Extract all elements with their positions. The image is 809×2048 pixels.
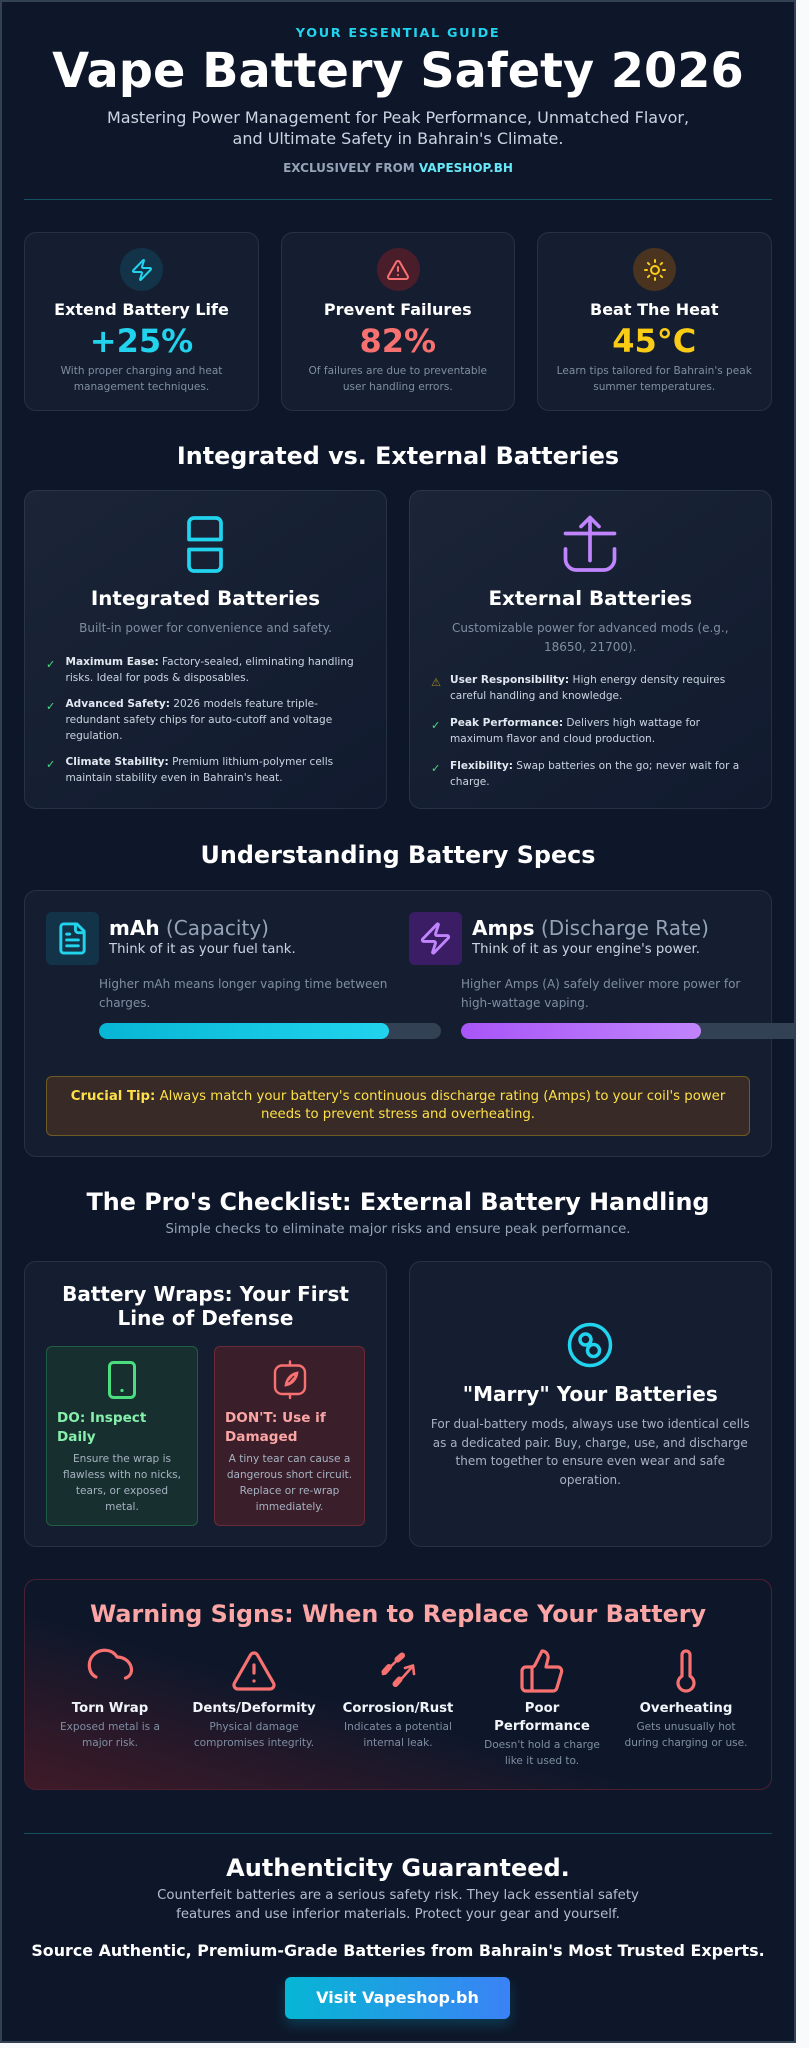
callout: crucial tip: needs to prevent stress and overheating. [261,1107,535,1122]
spec: mAh description: Higher mAh means longer vaping time between [99,977,387,991]
description: compromises integrity. [194,1737,314,1749]
icon: watch compass [274,1360,306,1400]
heading: Battery Wraps: Your First [62,1282,349,1306]
label: Corrosion/Rust [343,1701,453,1716]
description [431,1417,750,1487]
description: user handling errors. [343,381,453,393]
description: Doesn't hold a charge [484,1739,600,1751]
header [52,26,744,175]
panel: battery specs [24,890,772,1157]
spec: amps description: Higher Amps (A) safely deliver more power for [461,977,740,991]
subheading: checklist: Simple checks to eliminate major risks and ensure peak performance. [165,1222,631,1237]
call to action text: Source Authentic, Premium-Grade Batteries from Bahrain's Most Trusted Experts. [31,1941,765,1960]
panel: stat prevent failures [280,232,515,411]
eyebrow: YOUR ESSENTIAL GUIDE [296,26,500,41]
description: summer temperatures. [593,381,715,393]
description [0,1887,796,1925]
don't description: immediately. [256,1501,323,1513]
heading: Warning Signs: When to Replace Your Battery [90,1600,706,1628]
description: like it used to. [505,1755,579,1767]
icon: torn wrap cloud [88,1648,134,1680]
description: operation. [560,1473,621,1487]
description: major risk. [82,1737,138,1749]
list item: maximum ease: Maximum Ease: Factory-sealed, eliminating handling [66,656,354,668]
label: Performance [494,1719,590,1734]
list item: flexibility: Flexibility: Swap batteries on the go; never wait for a [450,760,739,772]
icon: split battery [187,516,223,573]
description: Indicates a potential [344,1721,452,1733]
heading: Prevent Failures [324,300,472,319]
do description: Ensure the wrap is [73,1453,171,1465]
panel: integrated batteries [24,490,387,809]
do heading: DO: Inspect [57,1410,146,1426]
heading: "Marry" Your Batteries [463,1382,718,1406]
list item: advanced safety: Advanced Safety: 2026 models feature triple- [66,698,318,710]
stat value: 82% [359,322,436,360]
panel: external batteries [408,490,772,809]
list item: maximum ease: risks. Ideal for pods & disposables. [66,672,249,684]
list item: flexibility: charge. [450,776,490,788]
list item: advanced safety: ✓ [46,700,55,712]
card: don't use if damaged [214,1346,365,1526]
spec: mAh description: charges. [99,996,150,1010]
panel: marry your batteries [408,1261,772,1547]
button: Visit Vapeshop.bh [316,1988,479,2007]
description [472,1737,612,1769]
stat value: 45°C [612,322,696,360]
sign: overheating [616,1647,756,1777]
description: Learn tips tailored for Bahrain's peak [557,365,752,377]
icon: removable battery arrow [564,516,616,572]
icon: thermometer [662,1647,710,1695]
bar: amps discharge [461,1023,803,1039]
list item: climate stability: ✓ [46,758,55,770]
list item: peak performance [431,716,700,744]
icon: warning triangle [376,248,420,291]
label: Torn Wrap [72,1701,148,1716]
don't heading: DON'T: Use if [225,1410,326,1426]
heading: Extend Battery Life [54,300,229,319]
icon: thumbs up [520,1649,564,1693]
heading: understanding specs: Understanding Battery Specs [201,841,595,869]
do description: metal. [105,1501,139,1513]
heading: External Batteries [488,587,692,610]
do heading [57,1410,146,1445]
do description [63,1453,181,1513]
spec: amps description [461,977,740,1010]
list item: climate stability: Climate Stability: Premium lithium-polymer cells [66,756,333,768]
icon: lightning [408,912,462,965]
stat value: +25% [90,322,193,360]
heading: Authenticity Guaranteed. [226,1854,570,1882]
description: With proper charging and heat [61,365,222,377]
list item: advanced safety: regulation. [66,730,122,742]
description [308,365,487,393]
description: management techniques. [74,381,209,393]
icon: smartphone [108,1361,136,1399]
subtitle: Mastering Power Management for Peak Performance, Unmatched Flavor, [107,108,689,127]
don't description: A tiny tear can cause a [229,1453,350,1465]
description [557,365,752,393]
list item: user responsibility [431,674,725,702]
description: features and use inferior materials. Protect your gear and yourself. [176,1907,620,1922]
spec: mAh analogy: Think of it as your fuel tank. [109,942,296,957]
footer: authenticity [0,1840,796,2035]
callout: crucial tip [46,1076,750,1136]
list item: user responsibility: ⚠ [431,676,441,688]
icon: corrosion plug [382,1652,416,1687]
don't description [227,1453,352,1513]
exclusive line: EXCLUSIVELY FROM VAPESHOP.BH [283,161,513,175]
sign: dents [192,1651,316,1749]
list item: advanced safety: redundant safety chips for auto-cutoff and voltage [66,714,332,726]
label: Overheating [640,1701,732,1716]
icon: lightning [120,248,163,291]
icon: warning triangle [232,1651,276,1691]
spec: mAh description [99,977,387,1010]
description: Of failures are due to preventable [308,365,487,377]
heading: Line of Defense [118,1306,293,1330]
spec: mAh heading: mAh (Capacity) [109,916,269,940]
description: For dual-battery mods, always use two identical cells [431,1417,750,1431]
panel: stat beat the heat [536,232,772,411]
description: Counterfeit batteries are a serious safety risk. They lack essential safety [157,1888,639,1903]
list item: peak performance: Peak Performance: Delivers high wattage for [450,716,700,728]
description [194,1721,314,1749]
don't description: dangerous short circuit. [227,1469,352,1481]
do description: flawless with no nicks, [63,1469,181,1481]
list item: flexibility [431,760,739,788]
panel: battery wraps [24,1261,387,1547]
sign: torn wrap [60,1648,160,1749]
label: Poor [525,1701,559,1716]
description: them together to ensure even wear and safe [456,1454,725,1468]
spec: amps heading: Amps (Discharge Rate) [472,916,709,940]
spec: amps description: high-wattage vaping. [461,996,589,1010]
title: Vape Battery Safety 2026 [52,44,744,99]
subheading: Built-in power for convenience and safety. [79,621,332,635]
heading: Integrated Batteries [91,587,320,610]
do heading: Daily [57,1429,96,1445]
label [494,1701,590,1734]
description: Gets unusually hot [636,1721,736,1733]
description [61,365,222,393]
list item: maximum ease: ✓ [46,658,55,670]
list item: climate stability: maintain stability even in Bahrain's heat. [66,772,283,784]
label: Dents/Deformity [192,1701,316,1716]
panel: warning signs [24,1579,772,1790]
icon: document [46,912,99,965]
bar: mAh capacity [99,1023,441,1039]
list item: flexibility: ✓ [431,762,440,774]
description: internal leak. [363,1737,433,1749]
icon: paired cells [568,1322,612,1368]
panel: stat extend battery life [24,232,259,411]
list item: user responsibility: User Responsibility: High energy density requires [450,674,725,686]
heading: integrated vs external: Integrated vs. External Batteries [177,442,619,470]
sign: poor performance [484,1649,600,1767]
don't heading [225,1410,326,1445]
list item: peak performance: maximum flavor and cloud production. [450,732,655,744]
description [616,1719,756,1751]
subheading [452,621,729,654]
description: Exposed metal is a [60,1721,160,1733]
subtitle [107,108,689,148]
subtitle: and Ultimate Safety in Bahrain's Climate. [233,129,563,148]
button [285,1977,510,2019]
don't heading: Damaged [225,1429,297,1445]
don't description: Replace or re-wrap [240,1485,339,1497]
list item: climate stability [46,756,333,784]
description [344,1721,452,1749]
sign: corrosion [343,1652,454,1749]
list item: maximum ease [46,656,354,684]
list item: peak performance: ✓ [431,718,440,732]
list item: advanced safety [46,698,332,742]
subheading: Customizable power for advanced mods (e.g., [452,621,729,635]
description: Physical damage [209,1721,299,1733]
description: during charging or use. [624,1737,748,1749]
spec: amps analogy: Think of it as your engine's power. [472,942,700,957]
list item: user responsibility: careful handling and knowledge. [450,690,622,702]
card: do inspect daily [46,1346,198,1526]
callout: crucial tip: Crucial Tip: Always match your battery's continuous discharge rating (Amps) to your coil's power [71,1088,725,1104]
heading: pro's checklist: The Pro's Checklist: External Battery Handling [87,1188,709,1216]
description [60,1721,160,1749]
description: as a dedicated pair. Buy, charge, use, and discharge [433,1436,748,1450]
do description: tears, or exposed [76,1485,168,1497]
heading: Beat The Heat [590,300,718,319]
icon: sun [633,248,676,291]
subheading: 18650, 21700). [544,640,636,654]
heading [62,1282,349,1330]
